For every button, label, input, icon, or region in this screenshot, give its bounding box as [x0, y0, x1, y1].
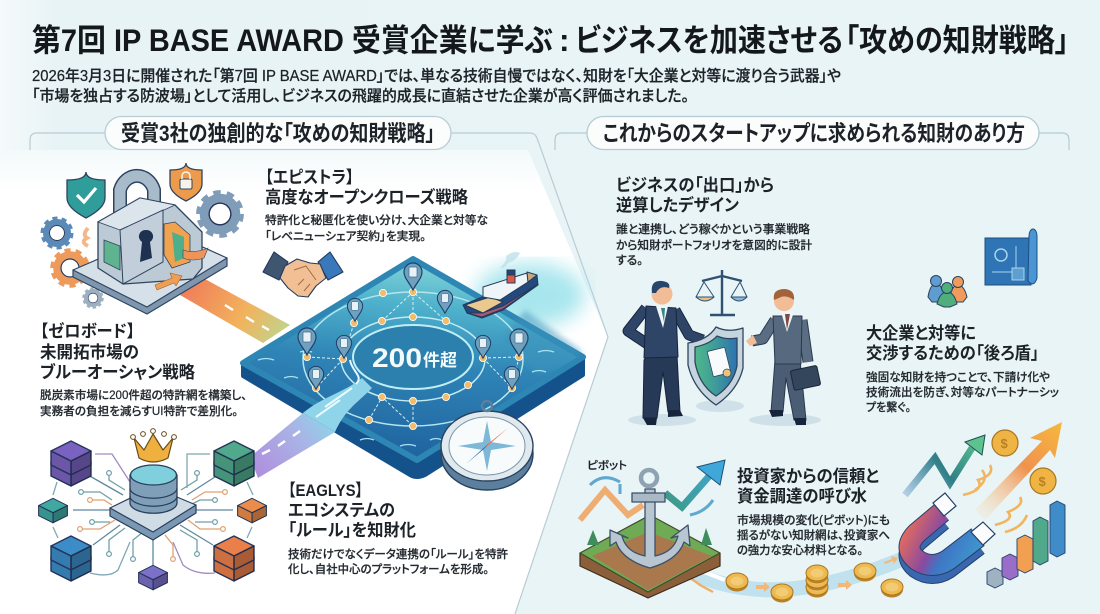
icon: shackle — [120, 176, 154, 222]
icon: horseshoe magnet — [910, 493, 995, 573]
heading pill: right section: これからのスタートアップに求められる知財のあり方 — [603, 121, 1025, 146]
text: investor trust: 揺るがない知財網は、投資家へ — [737, 528, 890, 542]
text: Zeroboard: 未開拓市場の — [40, 342, 139, 362]
icon: green shield — [67, 172, 105, 218]
icon: padlock with gears and shields — [42, 163, 241, 314]
path: river and purple band to network — [250, 360, 372, 478]
server platform — [110, 505, 196, 540]
heading pill: left section — [105, 116, 451, 150]
icon: blue gear — [42, 218, 72, 248]
label: pivot: ピボット — [587, 459, 627, 472]
panel: left white award panel — [0, 133, 608, 614]
icon: orange shield — [170, 163, 202, 201]
text: investor trust: 市場規模の変化(ピボット)にも — [737, 513, 890, 527]
text: backing for negotiating with large companies: 大企業と対等に — [866, 323, 976, 343]
text: backing for negotiating with large companies: プを繋ぐ。 — [866, 400, 911, 414]
icon: patent shield — [688, 327, 743, 405]
path: orange band from lock to map — [180, 278, 290, 343]
icon: coin stream — [677, 556, 905, 602]
network lines — [53, 454, 253, 575]
icon: sea map with 200 patents — [243, 259, 585, 477]
icon: zigzag orange arrow — [580, 490, 643, 520]
title: ビジネスを加速させる — [575, 22, 843, 58]
icon: anchor shape — [610, 470, 690, 568]
icon: small gear — [84, 289, 102, 307]
icon: orange gear — [53, 251, 87, 285]
text: Epistra: 「レベニューシェア契約」を実現。 — [265, 229, 426, 243]
text: Epistra — [265, 168, 488, 243]
cubes — [39, 441, 266, 590]
text: backing for negotiating with large companies: 技術流出を防ぎ、対等なパートナーシッ — [866, 385, 1059, 399]
icon: right businessman — [746, 289, 821, 425]
text: backing for negotiating with large companies: 強固な知財を持つことで、下請け化や — [866, 370, 1050, 384]
text: investor trust: 資金調達の呼び水 — [737, 486, 867, 506]
intro text: 2026年3月3日に開催された「第7回 IP BASE AWARD」では、単なる技術自慢ではなく、知財を「大企業と対等に渡り合う武器」や — [32, 67, 841, 85]
icon: people group — [928, 276, 967, 307]
title — [32, 22, 1069, 58]
center label: 200件超 — [353, 325, 473, 389]
icon: rising blue arrow — [665, 460, 725, 507]
icon: dollar coins: $ — [1000, 436, 1008, 451]
text: Zeroboard: ブルーオーシャン戦略 — [40, 362, 195, 382]
center label: 200件超: 件超 — [423, 351, 457, 370]
heading pill: right section — [587, 116, 1039, 150]
icon: left businessman — [628, 281, 703, 425]
text: business exit design: 逆算したデザイン — [616, 195, 739, 215]
text: backing for negotiating with large companies: 交渉するための「後ろ盾」 — [866, 343, 1039, 363]
text: Epistra: 特許化と秘匿化を使い分け、大企業と対等な — [265, 213, 488, 227]
icon: dollar coins — [992, 430, 1056, 494]
icon: businessmen with scales and shield — [628, 270, 821, 426]
title: : — [559, 22, 570, 58]
text: EAGLYS: 「ルール」を知財化 — [288, 521, 416, 540]
title: 第7回 IP BASE AWARD 受賞企業に学ぶ — [32, 22, 553, 58]
text: Zeroboard: 【ゼロボード】 — [40, 321, 135, 341]
text: business exit design: から知財ポートフォリオを意図的に設計 — [616, 238, 813, 252]
icon: scales — [696, 270, 747, 315]
text: investor trust: の強力な安心材料となる。 — [737, 543, 863, 557]
intro text: 「市場を独占する防波場」として活用し、ビジネスの飛躍的成長に直結させた企業が高く評価されました。 — [32, 86, 689, 105]
heading pill: left section: 受賞3社の独創的な「攻めの知財戦略」 — [121, 121, 435, 146]
panel outline: right bracket — [555, 133, 1069, 150]
text: EAGLYS: 【EAGLYS】 — [288, 481, 363, 500]
text: Epistra: 高度なオープンクローズ戦略 — [265, 187, 468, 207]
text: business exit design: する。 — [616, 254, 643, 267]
text: investor trust: 投資家からの信頼と — [737, 466, 879, 486]
text: EAGLYS: エコシステムの — [288, 501, 395, 520]
text: Zeroboard — [40, 321, 247, 418]
text: backing for negotiating with large companies — [866, 323, 1059, 414]
intro text — [32, 67, 841, 105]
icon: dollar coins: $ — [1038, 474, 1046, 489]
icon: platform — [73, 258, 227, 314]
text: Zeroboard: 脱炭素市場に200件超の特許網を構築し、 — [40, 388, 247, 402]
text: Epistra: 【エピストラ】 — [265, 168, 354, 187]
center label: 200件超: 200 — [372, 343, 422, 373]
icon: growth arrows — [905, 422, 1062, 532]
text: EAGLYS: 化し、自社中心のプラットフォームを形成。 — [288, 562, 489, 576]
icon: grey gear — [199, 193, 241, 235]
text: business exit design — [616, 175, 813, 267]
text: Zeroboard: 実務者の負担を減らすUI特許で差別化。 — [40, 404, 238, 418]
icon: compass — [441, 401, 533, 490]
icon: crown — [131, 429, 176, 462]
icon: anchor on ground — [580, 460, 725, 598]
icon: blueprint — [985, 229, 1037, 285]
text: business exit design: 誰と連携し、どう稼ぐかという事業戦略 — [616, 222, 811, 236]
text: EAGLYS — [288, 481, 508, 576]
chart: isometric rising bars — [987, 501, 1065, 588]
icon: data network with crown — [39, 429, 266, 590]
icon: lock body — [98, 198, 202, 284]
title: 「攻めの知財戦略」 — [845, 22, 1069, 58]
icons: patent pins and nodes — [298, 263, 528, 430]
database cylinder — [130, 475, 177, 513]
icon: ship — [463, 252, 538, 318]
text: business exit design: ビジネスの「出口」から — [616, 175, 774, 195]
text: investor trust — [737, 466, 890, 557]
text: EAGLYS: 技術だけでなくデータ連携の「ルール」を特許 — [288, 547, 508, 561]
icon: handshake — [263, 252, 343, 297]
